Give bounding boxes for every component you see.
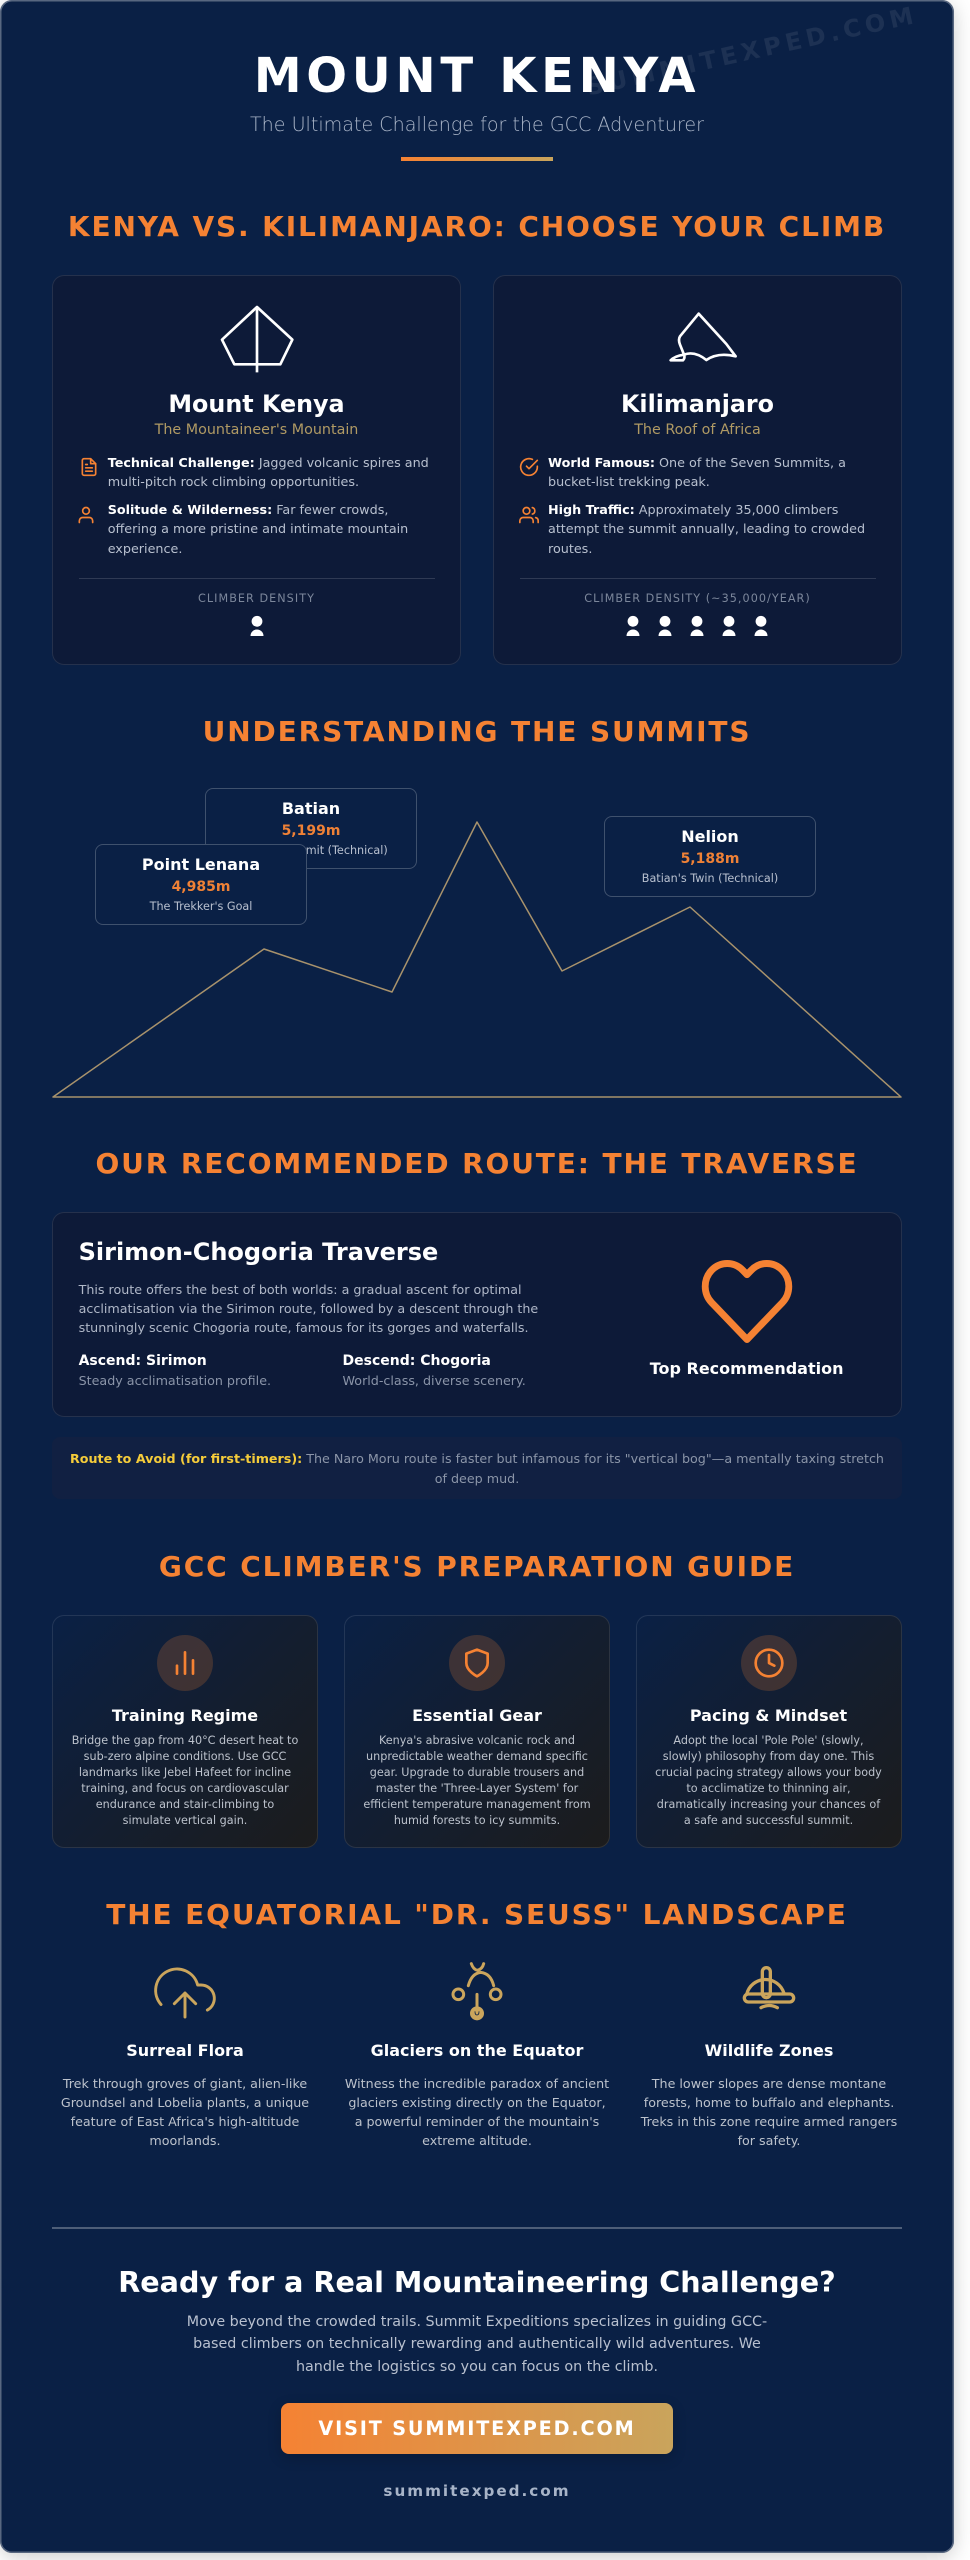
- card text: landmarks like Jebel Hafeet for incline: [79, 1766, 291, 1779]
- cta heading: Ready for a Real Mountaineering Challenge?: [118, 2265, 836, 2299]
- bullet: technical challenge: multi-pitch rock climbing opportunities.: [108, 475, 359, 490]
- column text: glaciers existing directly on the Equator,: [348, 2095, 606, 2110]
- bullet: high traffic: High Traffic: Approximately 35,000 climbers: [548, 503, 838, 518]
- column text: [345, 2076, 609, 2148]
- cta button: [281, 2403, 673, 2454]
- title: MOUNT KENYA: [254, 48, 700, 104]
- card text: a safe and successful summit.: [684, 1814, 853, 1827]
- icon: single person: [78, 506, 94, 524]
- card text: gear. Upgrade to durable trousers and: [370, 1766, 584, 1779]
- route description: acclimatisation via the Sirimon route, followed by a descent through the: [79, 1301, 538, 1316]
- panel: recommended route: [52, 1212, 902, 1417]
- mountain tagline: The Roof of Africa: [634, 422, 761, 438]
- heading: route: OUR RECOMMENDED ROUTE: THE TRAVERSE: [95, 1147, 859, 1180]
- bullet: solitude: [108, 503, 408, 557]
- icon: cloud with arrow: [154, 1968, 216, 2018]
- icon: glacier symbol: [452, 1962, 502, 2020]
- column title: Glaciers on the Equator: [371, 2041, 583, 2060]
- icon: bar chart: [157, 1635, 213, 1691]
- card text: humid forests to icy summits.: [394, 1814, 560, 1827]
- density label: CLIMBER DENSITY: [198, 592, 315, 605]
- icon: wildlife symbol: [742, 1966, 796, 2010]
- heading: summits: UNDERSTANDING THE SUMMITS: [203, 715, 751, 748]
- note: Batian's Twin (Technical): [642, 872, 778, 885]
- column text: forests, home to buffalo and elephants.: [644, 2095, 894, 2110]
- icon: group of people: [519, 506, 539, 524]
- card text: [655, 1734, 882, 1827]
- card text: endurance and stair-climbing to: [96, 1798, 274, 1811]
- density icon: one climber: [250, 616, 264, 636]
- heading: preparation: GCC CLIMBER'S PREPARATION GUIDE: [159, 1550, 795, 1582]
- card text: dramatically increasing your chances of: [657, 1798, 880, 1811]
- cta text: handle the logistics so you can focus on the climb.: [296, 2359, 658, 2375]
- summit label: Point Lenana: [95, 844, 307, 924]
- bullet: solitude: experience.: [108, 542, 182, 557]
- card text: master the 'Three-Layer System' for: [376, 1782, 578, 1795]
- density icons: five climbers: [626, 616, 768, 636]
- height: 4,985m: [172, 878, 230, 894]
- column text: [61, 2076, 309, 2148]
- bullet: world famous: World Famous: One of the Seven Summits, a: [548, 456, 846, 470]
- icon: kilimanjaro peak: [669, 312, 737, 362]
- card text: unpredictable weather demand specific: [366, 1750, 588, 1763]
- card title: Training Regime: [112, 1706, 258, 1725]
- panel: essential gear: [344, 1615, 610, 1848]
- chart: mountain outline: [52, 821, 902, 1098]
- card text: slowly) philosophy from day one. This: [663, 1750, 874, 1763]
- summit label: Batian: [205, 788, 417, 869]
- density label: CLIMBER DENSITY (~35,000/YEAR): [584, 592, 811, 605]
- note: Highest Summit (Technical): [234, 844, 388, 857]
- card title: Essential Gear: [412, 1706, 542, 1725]
- bullet: high traffic: routes.: [548, 542, 592, 557]
- icon: check circle: [520, 458, 538, 476]
- bullet: world famous: [548, 456, 846, 490]
- route description: [78, 1282, 538, 1335]
- column: glaciers: [345, 1962, 609, 2148]
- card text: sub-zero alpine conditions. Use GCC: [84, 1750, 286, 1763]
- cta button: VISIT SUMMITEXPED.COM: [318, 2417, 636, 2440]
- bullet: world famous: bucket-list trekking peak.: [548, 475, 710, 490]
- column title: Surreal Flora: [126, 2041, 244, 2060]
- icon: document: [82, 458, 96, 476]
- descend note: World-class, diverse scenery.: [342, 1373, 526, 1388]
- mountain name: Mount Kenya: [168, 390, 345, 418]
- bullet: technical challenge: [108, 456, 429, 490]
- ascend label: Ascend: Sirimon: [79, 1353, 207, 1369]
- summit label: Nelion: [604, 816, 816, 897]
- callout text: of deep mud.: [435, 1471, 519, 1486]
- column text: The lower slopes are dense montane: [652, 2076, 886, 2090]
- panel: pacing and mindset: [636, 1615, 902, 1848]
- heading: comparison: KENYA VS. KILIMANJARO: CHOOSE YOUR CLIMB: [68, 210, 886, 243]
- column: wildlife: [640, 1966, 897, 2148]
- route description: This route offers the best of both worlds: a gradual ascent for optimal: [79, 1282, 522, 1296]
- route description: stunningly scenic Chogoria route, famous for its gorges and waterfalls.: [79, 1320, 529, 1335]
- ascend note: Steady acclimatisation profile.: [79, 1373, 271, 1388]
- mountain name: Kilimanjaro: [621, 390, 774, 418]
- bullet: solitude: offering a more pristine and intimate mountain: [108, 522, 408, 537]
- card text: crucial pacing strategy allows your body: [655, 1766, 882, 1779]
- name: Nelion: [681, 827, 739, 846]
- card text: training, and focus on cardiovascular: [81, 1782, 289, 1795]
- card text: Adopt the local 'Pole Pole' (slowly,: [673, 1734, 864, 1747]
- name: Batian: [282, 799, 340, 818]
- card title: Pacing & Mindset: [690, 1706, 847, 1725]
- height: 5,188m: [681, 851, 739, 867]
- column text: Treks in this zone require armed rangers: [641, 2114, 897, 2129]
- column text: feature of East Africa's high-altitude: [71, 2114, 299, 2129]
- card text: [72, 1734, 298, 1827]
- bullet: high traffic: [548, 503, 865, 557]
- footer website: summitexped.com: [383, 2482, 571, 2500]
- callout text: [70, 1451, 884, 1486]
- icon: heart: [702, 1260, 792, 1343]
- bullet: solitude: Solitude & Wilderness: Far fewer crowds,: [108, 503, 388, 518]
- card text: simulate vertical gain.: [123, 1814, 247, 1827]
- mountain tagline: The Mountaineer's Mountain: [155, 422, 358, 438]
- icon: mount kenya peak: [220, 306, 294, 372]
- recommendation label: Top Recommendation: [650, 1359, 844, 1378]
- note: The Trekker's Goal: [150, 900, 252, 912]
- height: 5,199m: [282, 823, 340, 839]
- panel: Mount Kenya: [52, 275, 461, 665]
- column text: [640, 2076, 897, 2148]
- panel: call to action: [118, 2265, 836, 2500]
- card text: to acclimatize to thinning air,: [686, 1782, 851, 1795]
- cta text: Move beyond the crowded trails. Summit Expeditions specializes in guiding GCC-: [187, 2314, 767, 2330]
- column: surreal flora: [61, 1968, 309, 2148]
- subtitle: The Ultimate Challenge for the GCC Adventurer: [250, 113, 704, 136]
- column text: a powerful reminder of the mountain's: [355, 2114, 599, 2129]
- callout: route to avoid: [52, 1437, 902, 1499]
- column text: for safety.: [738, 2133, 800, 2148]
- column text: Trek through groves of giant, alien-like: [63, 2076, 307, 2090]
- card text: Kenya's abrasive volcanic rock and: [379, 1734, 575, 1747]
- callout text: Route to Avoid (for first-timers): The Naro Moru route is faster but infamous for its "vertical bog"—a mentally taxing stretch: [70, 1451, 884, 1466]
- panel: Kilimanjaro: [493, 275, 902, 665]
- cta text: [187, 2314, 767, 2375]
- bullet: high traffic: attempt the summit annually, leading to crowded: [548, 522, 865, 537]
- watermark: SUMMITEXPED.COM: [584, 1, 920, 101]
- card text: [363, 1734, 591, 1827]
- column text: Witness the incredible paradox of ancient: [345, 2076, 609, 2090]
- column title: Wildlife Zones: [705, 2041, 833, 2060]
- cta text: based climbers on technically rewarding and authentically wild adventures. We: [193, 2336, 761, 2352]
- panel: training regime: [52, 1615, 318, 1848]
- bullet: technical challenge: Technical Challenge: Jagged volcanic spires and: [108, 456, 429, 470]
- descend label: Descend: Chogoria: [342, 1353, 491, 1369]
- route title: Sirimon-Chogoria Traverse: [79, 1238, 438, 1266]
- icon: shield: [449, 1635, 505, 1691]
- card text: Bridge the gap from 40°C desert heat to: [72, 1734, 298, 1747]
- title underline: [401, 157, 553, 161]
- card text: efficient temperature management from: [363, 1798, 591, 1811]
- column text: moorlands.: [149, 2133, 221, 2148]
- name: Point Lenana: [142, 854, 260, 874]
- icon: clock: [740, 1635, 796, 1691]
- column text: Groundsel and Lobelia plants, a unique: [61, 2095, 309, 2110]
- heading: landscape: THE EQUATORIAL "DR. SEUSS" LANDSCAPE: [106, 1898, 848, 1931]
- column text: extreme altitude.: [422, 2133, 532, 2148]
